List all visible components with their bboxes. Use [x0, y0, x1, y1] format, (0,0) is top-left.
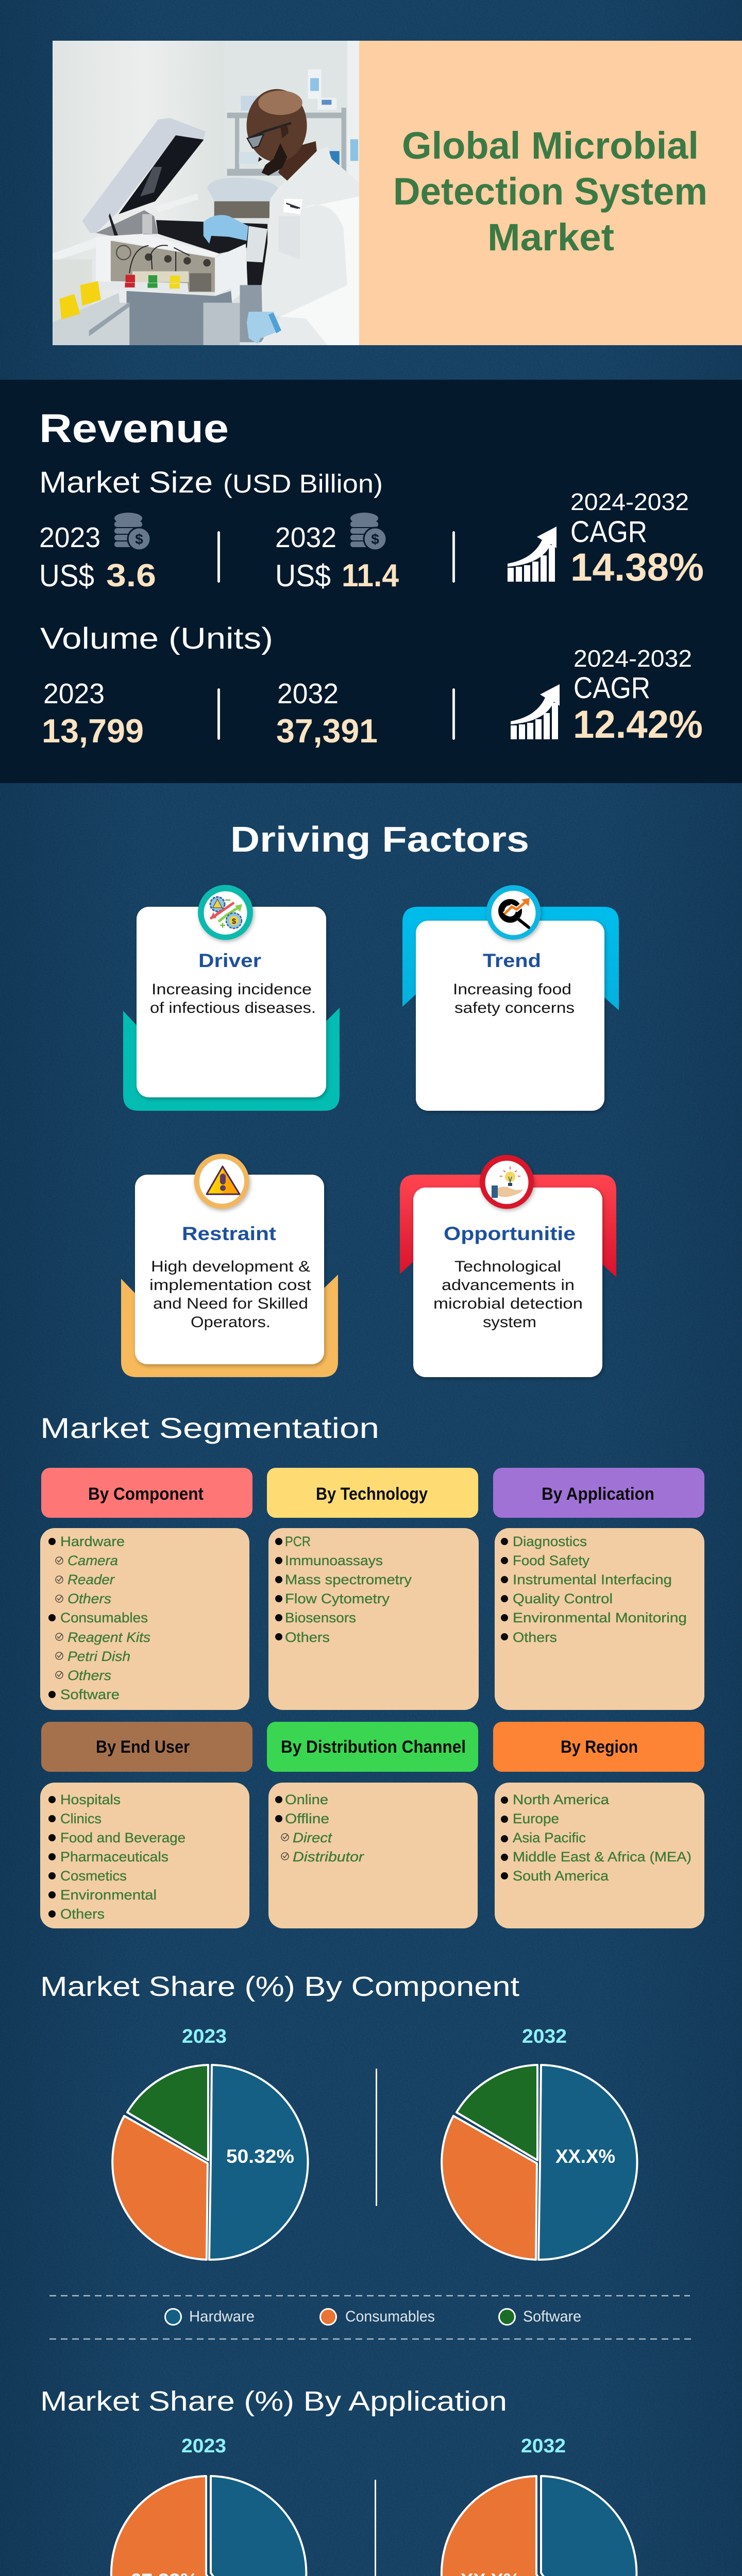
panel: by end user [40, 1722, 252, 1928]
list: application: Food Safety [513, 1553, 590, 1568]
list: component: Others [68, 1591, 111, 1606]
icon: coins 2032: $ [371, 531, 379, 547]
text: restraint description: and Need for Skilled [153, 1295, 308, 1312]
list: end user: Food and Beverage [60, 1830, 185, 1845]
volume 2023 [42, 677, 144, 750]
card: driver [123, 885, 340, 1111]
heading: market size [39, 466, 383, 499]
list: technology: Immunoassays [285, 1553, 383, 1568]
list: end user: Hospitals [60, 1792, 121, 1807]
list: component: Consumables [60, 1610, 148, 1625]
icon: coins 2032 [350, 513, 386, 550]
list: end user [48, 1792, 185, 1922]
text: opportunity description: microbial detection [433, 1295, 583, 1312]
text: driver description [150, 981, 316, 1016]
text: driver description: of infectious diseases. [150, 999, 316, 1016]
title [393, 124, 707, 259]
list: component: Hardware [60, 1534, 125, 1549]
CAGR volume [573, 645, 703, 747]
list: component [48, 1534, 150, 1702]
text: restraint description: implementation cost [149, 1277, 312, 1294]
panel: by technology: By Technology [316, 1484, 428, 1504]
icon: growth arrow [511, 684, 560, 739]
legend: component [49, 2296, 695, 2339]
list: distribution channel: Distributor [293, 1849, 364, 1865]
list: application: Diagnostics [513, 1534, 587, 1549]
market size 2032: 2032 [275, 521, 336, 553]
heading: share by component: Market Share (%) By Component [40, 1971, 519, 2002]
panel: revenue [0, 380, 742, 783]
icon: opportunity [480, 1155, 534, 1209]
text: restraint description: High development & [151, 1258, 310, 1275]
divider [376, 2069, 377, 2206]
pie chart: application 2023 [111, 2476, 306, 2576]
list: region: Europe [513, 1811, 559, 1826]
pie chart: component 2023: 50.32% [226, 2146, 294, 2167]
legend: component: Software [523, 2308, 581, 2325]
list: end user: Clinics [60, 1811, 102, 1826]
card: restraint [121, 1154, 338, 1377]
market size 2032: 11.4 [342, 558, 399, 594]
header banner [53, 41, 742, 345]
list: end user: Environmental [60, 1887, 157, 1903]
card: trend [402, 885, 619, 1111]
panel: by distribution channel [267, 1722, 478, 1928]
divider [375, 2480, 376, 2576]
list: region: Asia Pacific [513, 1830, 586, 1845]
list: distribution channel: Online [285, 1792, 328, 1807]
divider [217, 688, 220, 740]
divider [452, 531, 455, 583]
panel: by component: By Component [88, 1484, 204, 1504]
pie chart: application 2032 [442, 2476, 636, 2576]
list: component: Camera [68, 1553, 118, 1568]
market size 2023: 3.6 [106, 558, 156, 594]
panel: by region [493, 1722, 704, 1928]
market size 2023: US$ [39, 558, 94, 593]
label: 2032: 2032 [521, 2435, 566, 2457]
list: technology: Others [285, 1630, 330, 1645]
label: driver: Driver [198, 950, 261, 971]
list: application: Quality Control [513, 1591, 613, 1606]
CAGR revenue: 2024-2032 [570, 488, 689, 515]
legend: component: Consumables [345, 2308, 435, 2325]
legend: component: Hardware [189, 2308, 255, 2325]
market size 2023 [39, 521, 156, 594]
pie chart: component 2032 [442, 2065, 637, 2260]
volume 2032: 2032 [277, 677, 339, 709]
heading: share by application: Market Share (%) By Application [40, 2386, 507, 2417]
list: component: Petri Dish [68, 1649, 130, 1664]
CAGR volume: 12.42% [573, 703, 703, 747]
divider [452, 688, 455, 740]
list: distribution channel [275, 1792, 364, 1865]
divider [217, 531, 220, 583]
list: end user: Pharmaceuticals [60, 1849, 168, 1865]
market size 2032 [275, 521, 399, 594]
pie chart: component 2023 [112, 2065, 308, 2260]
heading: volume: Volume (Units) [40, 622, 273, 655]
panel: by end user: By End User [96, 1737, 190, 1757]
heading: revenue: Revenue [39, 405, 229, 451]
list: distribution channel: Direct [293, 1830, 333, 1845]
list: component: Software [60, 1687, 120, 1702]
photo: technician at microbial detection machine [53, 41, 359, 345]
text: restraint description: Operators. [191, 1314, 271, 1331]
heading: market size: Market Size [39, 466, 213, 499]
label: restraint: Restraint [182, 1223, 276, 1244]
CAGR revenue: CAGR [570, 515, 647, 549]
volume 2032 [276, 677, 378, 750]
market size 2032: US$ [275, 558, 331, 593]
list: end user: Cosmetics [60, 1868, 127, 1884]
icon: restraint [194, 1154, 249, 1209]
list: region [501, 1792, 692, 1884]
icon: coins 2023 [114, 513, 150, 550]
text: trend description [453, 981, 575, 1016]
list: region: South America [513, 1868, 609, 1884]
panel: by region: By Region [561, 1737, 638, 1757]
panel: by application [493, 1468, 704, 1710]
label: 2023: 2023 [181, 2435, 226, 2457]
heading: market segmentation: Market Segmentation [40, 1412, 379, 1444]
CAGR volume: CAGR [574, 671, 650, 705]
panel: by application: By Application [542, 1484, 654, 1504]
list: application: Environmental Monitoring [513, 1610, 687, 1625]
list: application: Instrumental Interfacing [513, 1572, 672, 1587]
title panel [359, 41, 742, 345]
text: driver description: Increasing incidence [151, 981, 312, 998]
label: trend: Trend [483, 950, 541, 971]
label: opportunity: Opportunitie [444, 1223, 576, 1244]
panel: by distribution channel: By Distribution Channel [281, 1737, 466, 1757]
list: end user: Others [60, 1906, 105, 1922]
title: Global Microbial [402, 124, 699, 167]
list: region: Middle East & Africa (MEA) [513, 1849, 692, 1865]
list: component: Reader [68, 1572, 115, 1587]
CAGR revenue [570, 488, 704, 589]
label: 2032: 2032 [522, 2026, 567, 2047]
list: technology: PCR [285, 1534, 311, 1549]
title: Market [487, 216, 614, 259]
list: technology: Flow Cytometry [285, 1591, 390, 1606]
list: application [501, 1534, 687, 1645]
CAGR revenue: 14.38% [570, 546, 704, 589]
icon: coins 2023: $ [135, 531, 143, 547]
icon: driver: $ [232, 917, 237, 926]
volume 2032: 37,391 [276, 712, 378, 750]
list: distribution channel: Offline [285, 1811, 329, 1826]
text: restraint description [149, 1258, 312, 1331]
panel: by technology [267, 1468, 479, 1710]
panel: by component [40, 1468, 252, 1710]
volume 2023: 2023 [43, 677, 105, 709]
text: trend description: Increasing food [453, 981, 571, 998]
volume 2023: 13,799 [42, 712, 144, 750]
card: opportunity [400, 1155, 616, 1377]
list: region: North America [513, 1792, 610, 1807]
market size 2023: 2023 [39, 521, 100, 553]
text: opportunity description [433, 1258, 583, 1331]
title: Detection System [393, 170, 707, 213]
heading: market size: (USD Billion) [223, 469, 383, 498]
list: technology [275, 1534, 412, 1645]
text: opportunity description: advancements in [442, 1277, 575, 1294]
list: technology: Biosensors [285, 1610, 356, 1625]
list: component: Others [68, 1668, 111, 1683]
icon: growth arrow [508, 527, 556, 582]
CAGR volume: 2024-2032 [574, 645, 692, 672]
icon: driver [198, 885, 253, 940]
text: opportunity description: Technological [454, 1258, 561, 1275]
icon: trend [486, 885, 541, 940]
pie chart: component 2032: XX.X% [555, 2146, 615, 2167]
list: application: Others [513, 1630, 557, 1645]
text: opportunity description: system [483, 1314, 536, 1331]
label: 2023: 2023 [182, 2026, 227, 2047]
text: trend description: safety concerns [454, 999, 575, 1016]
list: technology: Mass spectrometry [285, 1572, 412, 1587]
heading: driving factors: Driving Factors [230, 819, 529, 859]
list: component: Reagent Kits [68, 1630, 150, 1645]
